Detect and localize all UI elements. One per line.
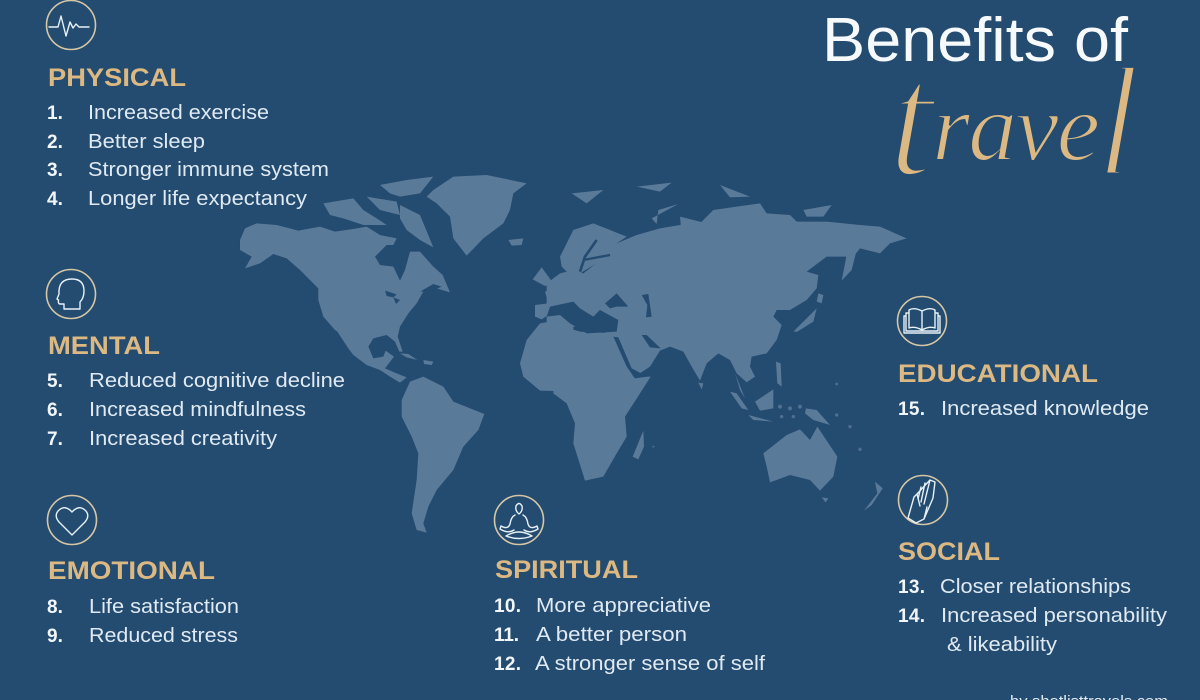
list: social benefits (898, 575, 1168, 656)
heading: spiritual: SPIRITUAL (495, 556, 638, 584)
list: physical benefits: 1. (47, 103, 63, 124)
panel: educational (898, 296, 1149, 420)
list: physical benefits: Longer life expectancy (88, 187, 308, 210)
list: mental benefits: 6. (47, 400, 63, 421)
list: spiritual benefits: 10. (494, 596, 521, 617)
list: physical benefits: 3. (47, 160, 63, 181)
icon: open book (898, 296, 946, 346)
panel: emotional (47, 496, 239, 647)
list: physical benefits: Better sleep (88, 130, 205, 153)
list: social benefits: & likeability (947, 633, 1058, 656)
heading: physical: PHYSICAL (48, 64, 186, 92)
panel: social (898, 476, 1168, 656)
list: mental benefits: Increased creativity (89, 427, 278, 450)
list: social benefits: 14. (898, 606, 925, 627)
list: mental benefits (47, 369, 345, 450)
icon: praying hands (898, 476, 948, 524)
list: physical benefits: Stronger immune system (88, 158, 329, 181)
list: social benefits: 13. (898, 577, 925, 598)
icon: head (46, 270, 96, 318)
icon: heart (48, 496, 96, 544)
list: social benefits: Closer relationships (940, 575, 1131, 598)
list: spiritual benefits: A stronger sense of self (535, 652, 765, 675)
list: physical benefits: 4. (47, 189, 63, 210)
list: educational benefits: 15. (898, 399, 925, 420)
panel: spiritual (494, 496, 765, 675)
panel: physical (46, 0, 329, 210)
list: physical benefits: Increased exercise (88, 101, 269, 124)
heading: mental: MENTAL (48, 332, 160, 360)
heading: Benefits of: Benefits of (822, 6, 1129, 75)
list: spiritual benefits: 11. (494, 625, 519, 646)
list: mental benefits: 7. (47, 429, 63, 450)
world map (240, 175, 907, 533)
heading: social: SOCIAL (898, 538, 1000, 566)
script word: travel: t (888, 28, 938, 211)
list: emotional benefits (47, 595, 239, 647)
list: emotional benefits: Reduced stress (89, 624, 238, 647)
title (822, 6, 1140, 211)
list: physical benefits: 2. (47, 132, 63, 153)
list: emotional benefits: 9. (47, 626, 63, 647)
script word: travel: rave (932, 74, 1099, 182)
list: mental benefits: Reduced cognitive decline (89, 369, 345, 392)
list: spiritual benefits: More appreciative (536, 594, 711, 617)
list: emotional benefits: Life satisfaction (89, 595, 239, 618)
list: spiritual benefits: 12. (494, 654, 521, 675)
list: educational benefits: Increased knowledge (941, 397, 1149, 420)
icon: heartbeat (46, 0, 96, 50)
script word: travel: l (1096, 35, 1140, 210)
list: emotional benefits: 8. (47, 597, 63, 618)
heading: educational: EDUCATIONAL (898, 360, 1098, 388)
panel: mental (46, 270, 345, 450)
list: physical benefits (47, 101, 329, 210)
icon: meditating figure (494, 496, 544, 544)
list: spiritual benefits: A better person (536, 623, 687, 646)
list: social benefits: Increased personability (941, 604, 1168, 627)
list: mental benefits: Increased mindfulness (89, 398, 306, 421)
heading: emotional: EMOTIONAL (48, 557, 215, 585)
list: mental benefits: 5. (47, 371, 63, 392)
list: spiritual benefits (494, 594, 765, 675)
